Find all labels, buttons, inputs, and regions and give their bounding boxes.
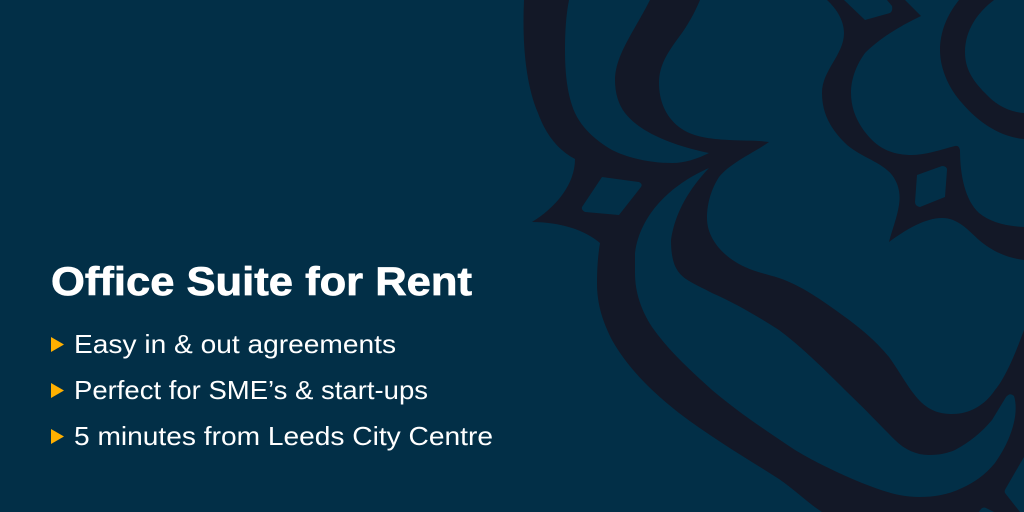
title: Office Suite for Rent [51,260,472,304]
bullet 1 [51,329,396,359]
bullet list [51,329,493,451]
bullet 3 [51,421,493,451]
text: bullet 2: Perfect for SME’s & start-ups [74,375,428,405]
bullet 2 [51,375,428,405]
lion logo watermark [524,0,1024,512]
watermark: centre-right curl [822,0,1024,260]
watermark: top-right ring [940,0,1024,139]
text: bullet 1: Easy in & out agreements [74,329,396,359]
icon: bullet arrow 2 [51,383,64,398]
watermark: main body strokes [524,0,1024,512]
icon: bullet arrow 1 [51,337,64,352]
text: bullet 3: 5 minutes from Leeds City Centre [74,421,493,451]
icon: bullet arrow 3 [51,429,64,444]
